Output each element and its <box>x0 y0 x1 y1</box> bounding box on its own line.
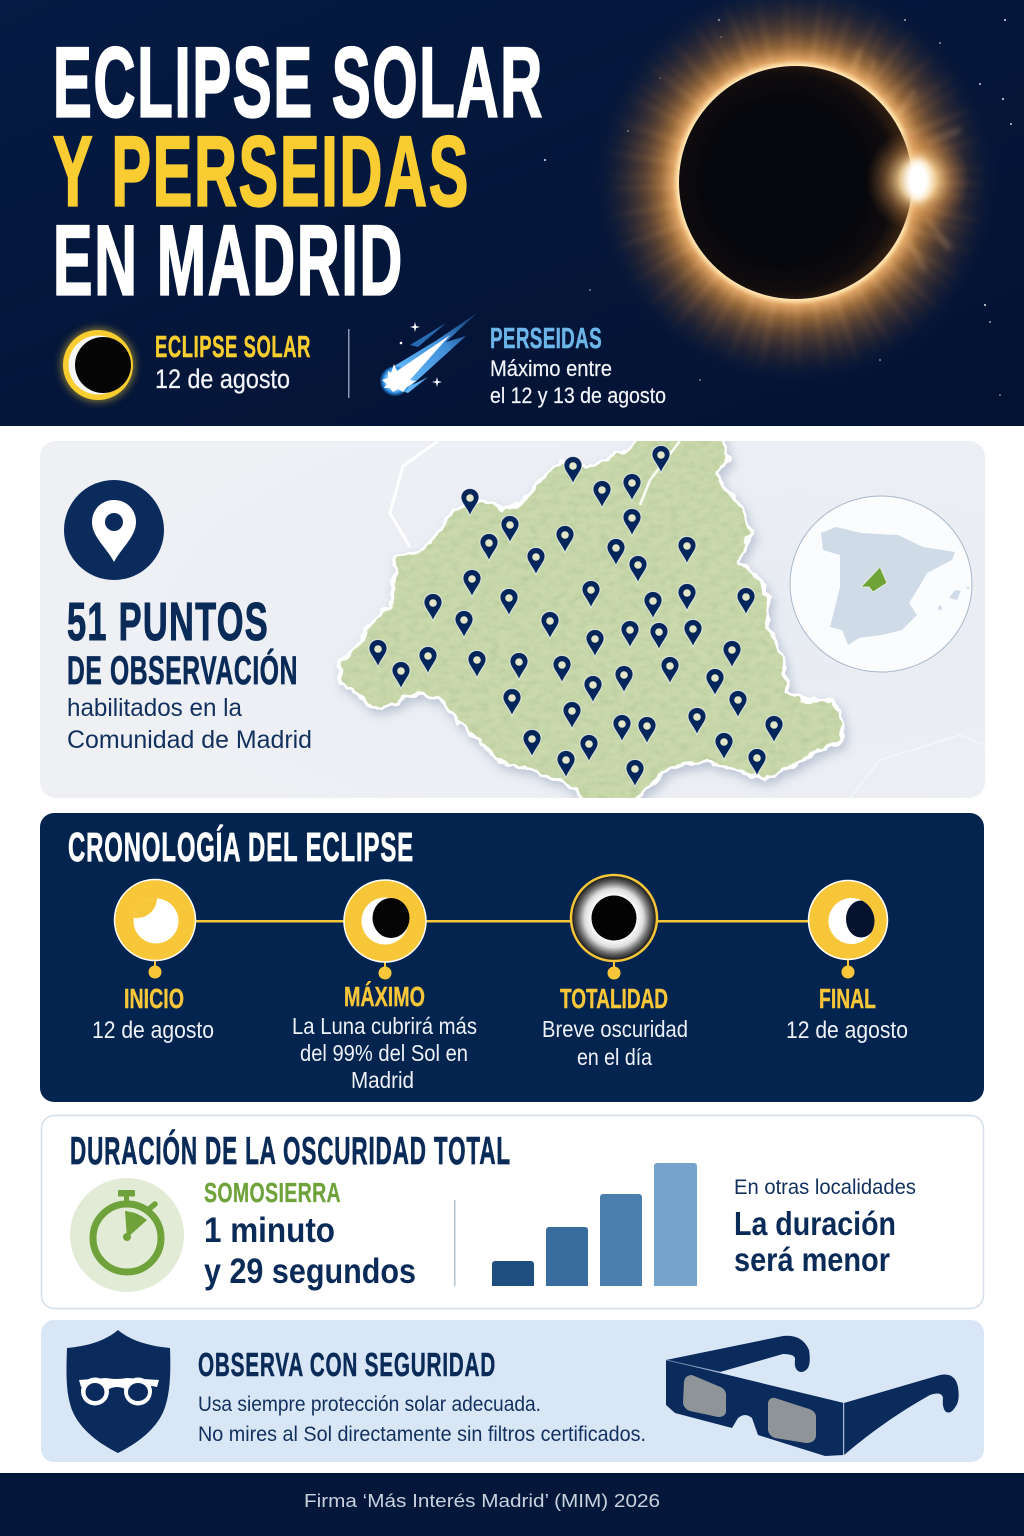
text: safety: Usa siempre protección solar adecuada. <box>198 1393 541 1416</box>
stage: inicio <box>92 878 214 1044</box>
title: Y PERSEIDAS <box>53 116 470 226</box>
eclipse date: 12 de agosto <box>155 364 290 394</box>
icon: stopwatch <box>70 1178 184 1292</box>
icon: eclipse glasses <box>666 1336 959 1456</box>
map pins <box>369 446 783 786</box>
stage: maximo <box>292 880 477 1093</box>
stage: final: FINAL <box>819 983 876 1014</box>
stage: totalidad <box>542 875 688 1070</box>
stage: totalidad: TOTALIDAD <box>560 983 668 1014</box>
stage: maximo: La Luna cubrirá más <box>292 1013 477 1039</box>
icon: comet <box>380 313 477 396</box>
stage: totalidad: en el día <box>577 1044 652 1070</box>
text: availability: habilitados en la <box>67 694 242 722</box>
text: Somosierra duration <box>204 1177 416 1291</box>
text: Somosierra duration: y 29 segundos <box>204 1252 416 1291</box>
heading: 51 puntos: DE OBSERVACIÓN <box>67 647 298 693</box>
perseidas date: Máximo entre <box>490 356 612 381</box>
stage: totalidad: Breve oscuridad <box>542 1016 688 1042</box>
perseidas date <box>490 323 666 408</box>
panel: header <box>0 0 1024 426</box>
eclipse illustration <box>590 0 1000 388</box>
heading: chronology: CRONOLOGÍA DEL ECLIPSE <box>68 824 414 870</box>
panel: chronology <box>40 813 984 1102</box>
text: safety: No mires al Sol directamente sin filtros certificados. <box>198 1423 646 1446</box>
perseidas date: el 12 y 13 de agosto <box>490 383 666 408</box>
title <box>53 26 544 316</box>
stage: final <box>786 880 908 1044</box>
text: availability <box>67 694 312 754</box>
icon: shield with glasses <box>67 1330 170 1453</box>
heading: 51 puntos <box>67 592 298 693</box>
stage: inicio: 12 de agosto <box>92 1017 214 1044</box>
map of Madrid <box>340 436 842 806</box>
title: ECLIPSE SOLAR <box>53 26 544 138</box>
text: other localities: será menor <box>734 1241 890 1278</box>
panel: duration <box>42 1116 984 1308</box>
text: other localities: La duración <box>734 1205 896 1242</box>
title: EN MADRID <box>53 204 404 316</box>
eclipse date <box>155 329 311 394</box>
heading: 51 puntos: 51 PUNTOS <box>67 592 269 652</box>
text: availability: Comunidad de Madrid <box>67 726 312 754</box>
icon: small eclipse <box>61 328 135 402</box>
text: safety: OBSERVA CON SEGURIDAD <box>198 1346 496 1383</box>
footer <box>0 1473 1024 1536</box>
stage: maximo: Madrid <box>351 1067 414 1093</box>
locator: Spain inset <box>790 496 972 672</box>
stage: final: 12 de agosto <box>786 1017 908 1044</box>
stage: inicio: INICIO <box>124 983 184 1014</box>
icon: location pin <box>64 480 164 580</box>
stage: maximo: MÁXIMO <box>344 981 425 1012</box>
text: safety <box>198 1346 646 1446</box>
bar chart <box>492 1163 697 1286</box>
stage: maximo: del 99% del Sol en <box>300 1040 468 1066</box>
eclipse date: ECLIPSE SOLAR <box>155 329 311 364</box>
text: Somosierra duration: 1 minuto <box>204 1211 335 1250</box>
text: Somosierra duration: SOMOSIERRA <box>204 1177 341 1208</box>
panel: safety <box>41 1320 984 1462</box>
text: other localities <box>734 1176 916 1278</box>
footer: Firma ‘Más Interés Madrid’ (MIM) 2026 <box>304 1490 660 1511</box>
heading: duration: DURACIÓN DE LA OSCURIDAD TOTAL <box>70 1129 511 1173</box>
panel: observation points <box>40 436 985 806</box>
text: other localities: En otras localidades <box>734 1176 916 1199</box>
perseidas date: PERSEIDAS <box>490 323 602 355</box>
